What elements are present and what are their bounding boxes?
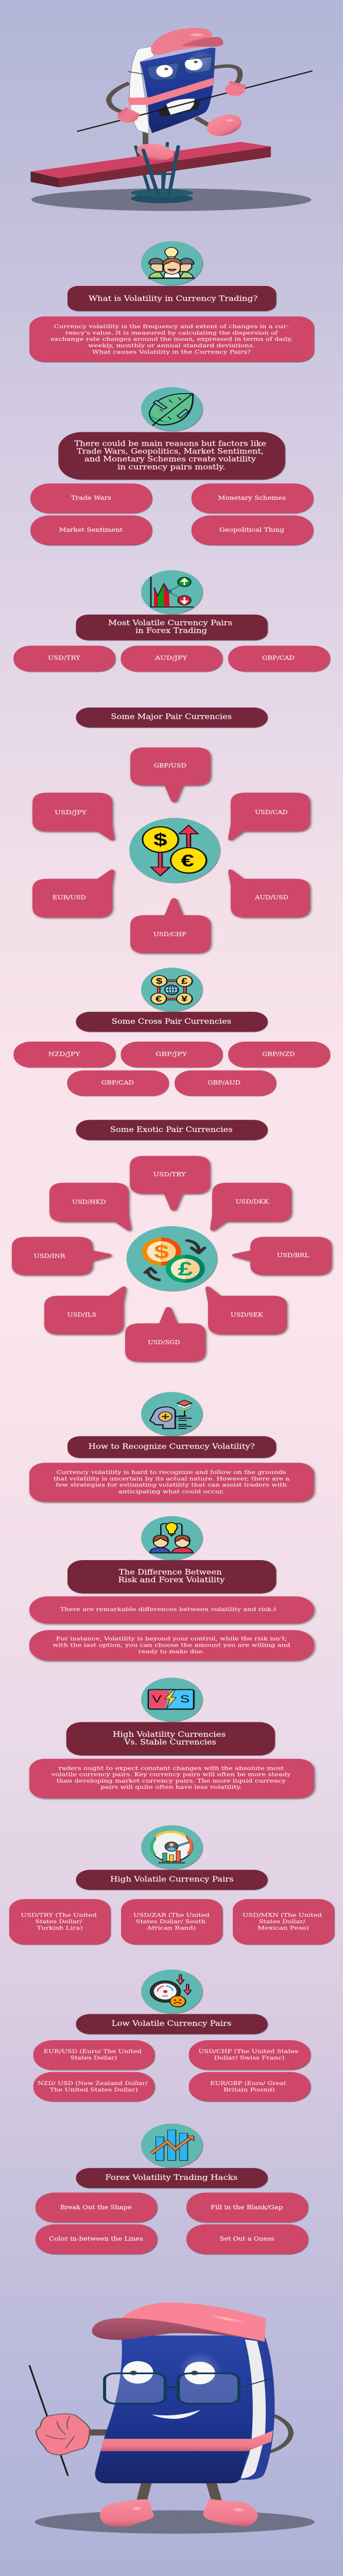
icon: rising bar chart	[141, 2124, 202, 2167]
callout: usd/chf	[130, 898, 211, 953]
callout: aud/usd: AUD/USD	[254, 895, 288, 901]
pill: break out the shape: Break Out the Shape	[60, 2205, 132, 2211]
callout: usd/cad	[228, 793, 310, 840]
icon: leaf	[141, 387, 202, 431]
heading: trading hacks	[76, 2168, 268, 2188]
icon: head with ideas	[141, 1392, 202, 1436]
pill: aud/jpy	[121, 646, 222, 672]
panel: instance text	[29, 1630, 314, 1660]
callout: usd/try	[130, 1156, 210, 1211]
callout: eur/usd	[32, 870, 114, 918]
pill: trade wars: Trade Wars	[71, 495, 111, 501]
pill: usd/chf	[189, 2040, 311, 2070]
card: usd/zar: African Rand)	[146, 1924, 196, 1931]
callout: usd/cad: USD/CAD	[255, 809, 288, 816]
pill: color in-between the lines	[36, 2224, 157, 2254]
heading: low volatile pairs: Low Volatile Currency Pairs	[112, 2019, 231, 2028]
panel: volatility definition: rency's value. It is measured by calculating the dispersion of	[65, 329, 278, 336]
callout: usd/sgd	[125, 1307, 205, 1362]
pill: eur/usd: EUR/USD (Euro/ The United	[43, 2048, 142, 2054]
heading: trading hacks: Forex Volatility Trading Hacks	[105, 2174, 237, 2182]
pill: gbp/cad	[228, 646, 330, 672]
panel: instance text: with the last option, you can choose the amount you are willing and	[53, 1642, 290, 1648]
section: exotic pairs	[12, 1120, 332, 1362]
heading: what is volatility	[67, 286, 276, 311]
heading: recognizing volatility: How to Recognize Currency Volatility?	[89, 1443, 254, 1451]
pill: gbp/jpy: GBP/JPY	[156, 1051, 187, 1058]
icon: dollar and pound exchange: $	[154, 1241, 169, 1262]
pill: fill in the blank	[186, 2193, 308, 2223]
card: usd/zar	[121, 1899, 222, 1944]
pill: gbp/cad	[67, 1071, 169, 1096]
icon: versus card	[141, 1677, 202, 1721]
callout: usd/sgd: USD/SGD	[148, 1340, 180, 1346]
heading: recognizing volatility	[67, 1436, 276, 1458]
heading: risk vs volatility: The Difference Between	[119, 1568, 222, 1577]
pill: eur/gbp: Britain Pound)	[224, 2087, 275, 2093]
section: major pairs	[32, 707, 310, 953]
pill: gbp/cad: GBP/CAD	[262, 655, 295, 662]
card: usd/try	[9, 1899, 110, 1944]
section: risk vs volatility	[29, 1516, 314, 1660]
pill: gbp/cad: GBP/CAD	[101, 1080, 134, 1086]
pill: set out a guess: Set Out a Guess	[219, 2236, 275, 2242]
callout: usd/hkd	[49, 1183, 131, 1231]
callout: usd/sek: USD/SEK	[231, 1312, 263, 1318]
section: what is volatility	[29, 241, 314, 362]
pill: nzd/jpy	[13, 1042, 115, 1067]
pill: market sentiment: Market Sentiment	[59, 527, 123, 533]
callout: usd/jpy	[32, 793, 114, 840]
panel: instance text: For instance, Volatility is beyond your control, while the risk isn't;	[56, 1635, 287, 1641]
icon: world currencies ring: $	[156, 977, 163, 986]
pill: gbp/aud: GBP/AUD	[208, 1080, 241, 1086]
panel: recognizing volatility text: that volatility is uncertain by its actual nature. However, there are a	[54, 1476, 289, 1482]
panel: remarkable differences: There are remarkable differences between volatility and risk.t	[60, 1606, 277, 1613]
panel: constant changes text	[29, 1759, 314, 1798]
icon: versus card: V	[152, 1693, 162, 1705]
heading: high volatility vs stable: Vs. Stable Currencies	[124, 1738, 216, 1747]
icon: low gauge with sad face	[141, 1970, 202, 2013]
section: recognizing volatility	[29, 1392, 314, 1502]
heading: causes of volatility: and Monetary Schemes create volatility	[84, 455, 256, 464]
panel: remarkable differences	[29, 1597, 314, 1623]
pill: usd/try	[13, 646, 115, 672]
heading: exotic pairs: Some Exotic Pair Currencies	[110, 1126, 233, 1134]
pill: fill in the blank: Fill in the Blank/Gap	[211, 2205, 283, 2211]
panel: recognizing volatility text: anticipating what could occur.	[118, 1488, 224, 1495]
pill: usd/chf: Dollar/ Swiss Franc)	[214, 2055, 285, 2061]
pill: geopolitical thing: Geopolitical Thing	[219, 527, 284, 533]
icon: world currencies ring: €	[156, 995, 162, 1004]
card: usd/mxn	[233, 1899, 334, 1944]
card: usd/mxn: USD/MXN (The United	[243, 1912, 322, 1918]
panel: constant changes text: raders ought to expect constant changes with the absolute most	[59, 1765, 284, 1771]
pill: set out a guess	[186, 2224, 308, 2254]
icon: price chart with up and down signals	[141, 570, 202, 614]
heading: high volatile pairs: High Volatile Currency Pairs	[110, 1875, 234, 1884]
heading: risk vs volatility: Risk and Forex Volatility	[118, 1576, 225, 1584]
icon: dollar and euro exchange	[129, 818, 220, 883]
heading: cross pairs	[76, 1012, 268, 1032]
icon: world currencies ring	[141, 968, 202, 1011]
heading: major pairs	[76, 707, 268, 727]
card: usd/mxn: Mexican Peso)	[258, 1924, 309, 1931]
section: trading hacks	[36, 2124, 308, 2254]
pill: break out the shape	[36, 2193, 157, 2223]
callout: usd/ils	[44, 1286, 126, 1334]
callout: usd/brl	[232, 1237, 332, 1275]
footer illustration: book character with pointer	[29, 2302, 315, 2534]
card: usd/try: States Dollar/	[35, 1918, 82, 1925]
section: causes of volatility	[30, 387, 313, 545]
panel: recognizing volatility text	[29, 1463, 314, 1502]
callout: gbp/usd	[130, 748, 211, 802]
icon: high gauge with bars	[141, 1825, 202, 1869]
callout: usd/dkk	[210, 1183, 291, 1231]
callout: usd/chf: USD/CHF	[153, 931, 186, 938]
panel: instance text: ready to make due.	[138, 1648, 205, 1654]
hero illustration: book character on seesaw	[30, 28, 312, 211]
panel: constant changes text: than developing market currency pairs. The more liquid currency	[57, 1777, 286, 1784]
section: cross pairs	[13, 968, 330, 1096]
card: usd/zar: States Dollar/ South	[135, 1918, 205, 1925]
heading: most volatile pairs	[76, 615, 268, 640]
heading: risk vs volatility	[67, 1560, 276, 1594]
card: usd/try: USD/TRY (The United	[21, 1912, 97, 1918]
panel: constant changes text: volatile currency pairs. Key currency pairs will often be more steady	[51, 1771, 291, 1777]
section: low volatile pairs	[33, 1970, 311, 2102]
pill: monetary schemes: Monetary Schemes	[218, 495, 286, 501]
section: high volatility vs stable	[29, 1677, 314, 1798]
callout: usd/inr: USD/INR	[34, 1253, 66, 1260]
panel: volatility definition: Currency volatility is the frequency and extent of changes in a cur-	[54, 323, 289, 330]
card: usd/try: Turkish Lira)	[37, 1924, 83, 1931]
heading: causes of volatility: in currency pairs mostly.	[117, 463, 225, 471]
panel: volatility definition: exchange rate changes around the mean, expressed in terms of daily,	[50, 336, 293, 342]
heading: low volatile pairs	[76, 2014, 268, 2034]
card: usd/mxn: States Dollar/	[259, 1918, 306, 1925]
callout: usd/jpy: USD/JPY	[55, 810, 87, 816]
icon: dollar and pound exchange: £	[178, 1258, 193, 1280]
callout: usd/dkk: USD/DKK	[236, 1199, 269, 1205]
heading: what is volatility: What is Volatility in Currency Trading?	[89, 295, 258, 303]
heading: causes of volatility: There could be main reasons but factors like	[74, 439, 266, 448]
pill: market sentiment	[30, 515, 152, 545]
pill: eur/gbp	[189, 2072, 311, 2102]
callout: gbp/usd: GBP/USD	[154, 763, 186, 769]
pill: aud/jpy: AUD/JPY	[155, 655, 187, 662]
pill: eur/gbp: EUR/GBP (Euro/ Great	[210, 2080, 286, 2086]
callout: usd/brl: USD/BRL	[277, 1252, 309, 1259]
pill: eur/usd	[33, 2040, 155, 2070]
pill: monetary schemes	[192, 483, 313, 513]
pill: nzd/jpy: NZD/JPY	[48, 1051, 80, 1058]
pill: eur/usd: States Dollar)	[70, 2055, 117, 2061]
panel: volatility definition	[29, 316, 314, 362]
panel: volatility definition: weekly, monthly or annual standard deviations.	[88, 342, 255, 348]
pill: gbp/nzd	[228, 1042, 330, 1067]
pill: gbp/jpy	[121, 1042, 222, 1067]
heading: most volatile pairs: Most Volatile Currency Pairs	[108, 619, 232, 627]
pill: color in-between the lines: Color in-between the Lines	[49, 2236, 143, 2242]
pill: geopolitical thing	[192, 515, 313, 545]
callout: usd/try: USD/TRY	[153, 1172, 186, 1178]
pill: usd/try: USD/TRY	[48, 655, 80, 662]
icon: world currencies ring: ¥	[181, 995, 188, 1004]
heading: causes of volatility: Trade Wars, Geopolitics, Market Sentiment,	[77, 447, 264, 455]
pill: gbp/aud	[175, 1071, 276, 1096]
heading: exotic pairs	[76, 1120, 268, 1140]
icon: two people sharing an idea	[141, 1516, 202, 1560]
pill: nzd/usd	[33, 2072, 155, 2102]
callout: eur/usd: EUR/USD	[53, 895, 86, 901]
icon: dollar and pound exchange	[127, 1226, 217, 1291]
icon: world currencies ring: £	[181, 977, 188, 986]
pill: gbp/nzd: GBP/NZD	[262, 1051, 295, 1058]
heading: high volatility vs stable	[66, 1722, 275, 1755]
pill: trade wars	[30, 483, 152, 513]
callout: aud/usd	[228, 870, 310, 918]
callout: usd/inr	[12, 1237, 111, 1275]
panel: volatility definition: What causes Volatility in the Currency Pairs?	[92, 349, 251, 355]
icon: three people with light bulb	[141, 241, 202, 285]
panel: recognizing volatility text: Currency volatility is hard to recognize and follow on the grounds	[57, 1469, 286, 1476]
callout: usd/hkd: USD/HKD	[72, 1199, 106, 1206]
heading: cross pairs: Some Cross Pair Currencies	[112, 1017, 231, 1026]
card: usd/zar: USD/ZAR (The United	[133, 1912, 210, 1918]
heading: high volatile pairs	[76, 1870, 268, 1890]
pill: nzd/usd: NZD/ USD (New Zealand Dollar/	[38, 2080, 148, 2086]
section: high volatile pairs	[9, 1825, 334, 1944]
panel: constant changes text: pairs will quite often have less volatility.	[100, 1784, 242, 1790]
icon: dollar and euro exchange: €	[181, 852, 194, 870]
icon: dollar and euro exchange: $	[153, 829, 167, 850]
icon: versus card: S	[180, 1693, 190, 1705]
pill: nzd/usd: The United States Dollar)	[49, 2087, 138, 2093]
heading: most volatile pairs: in Forex Trading	[135, 626, 207, 635]
heading: causes of volatility	[58, 432, 285, 480]
callout: usd/ils: USD/ILS	[67, 1312, 96, 1318]
callout: usd/sek	[205, 1286, 287, 1334]
pill: usd/chf: USD/CHF (The United States	[198, 2048, 298, 2054]
section: most volatile pairs	[13, 570, 330, 672]
heading: high volatility vs stable: High Volatility Currencies	[113, 1731, 226, 1739]
panel: recognizing volatility text: few strategies for estimating volatility that can assist traders with	[56, 1482, 287, 1488]
heading: major pairs: Some Major Pair Currencies	[111, 713, 232, 721]
